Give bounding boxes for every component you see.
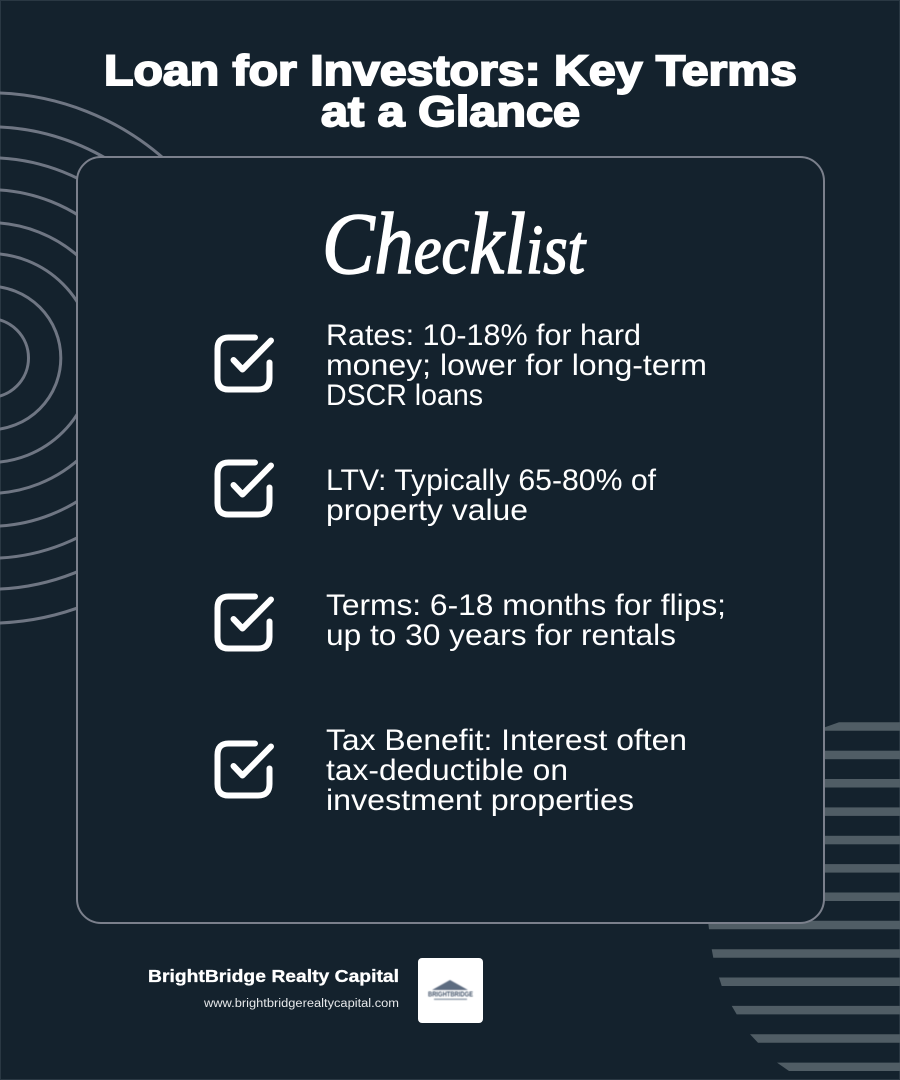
logo: BRIGHTBRIDGE [428,992,473,998]
text: LTV: property value [326,494,528,527]
text: rates: money; lower for long-term [326,349,707,382]
heading: Checklist: Checklist [322,196,586,293]
footer brand text [148,966,399,1010]
title [104,47,797,136]
text: terms: Terms: 6-18 months for flips; [326,589,726,622]
icon: check box 1 [218,338,271,390]
title: at a Glance [321,88,580,136]
icon: check box 4 [218,744,271,796]
footer brand text: BrightBridge Realty Capital [148,966,399,986]
text: tax benefit: Tax Benefit: Interest often [326,724,687,757]
panel: checklist card [77,157,824,923]
text: rates [326,319,707,412]
text: LTV: LTV: Typically 65-80% of [326,464,657,497]
text: rates: Rates: 10-18% for hard [326,319,641,352]
decorative concentric circles [0,93,254,623]
icon: check box 2 [218,462,271,514]
text: rates: DSCR loans [326,379,483,412]
text: terms: up to 30 years for rentals [326,619,676,652]
text: tax benefit: tax-deductible on [326,754,568,787]
logo [418,958,483,1023]
text: tax benefit [326,724,687,817]
icon: check box 3 [218,596,271,648]
text: tax benefit: investment properties [326,784,634,817]
decorative stripes [708,722,900,1071]
text: terms [326,589,726,652]
footer brand text: www.brightbridgerealtycapital.com [203,998,399,1010]
title: Loan for Investors: Key Terms [104,47,797,95]
text: LTV [326,464,657,527]
